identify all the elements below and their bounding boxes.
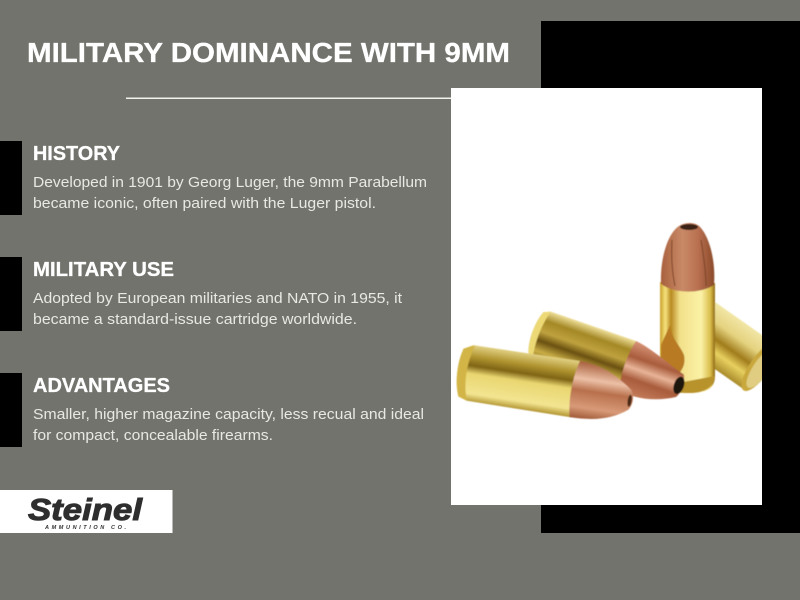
advantages body text: for compact, concealable firearms.: [33, 427, 273, 444]
logo: Steinel Ammunition Co.: Steinel: [28, 492, 144, 527]
panel: military use: [0, 257, 403, 331]
advantages body text: Smaller, higher magazine capacity, less recual and ideal: [33, 406, 424, 423]
title underline: [126, 98, 451, 99]
black backing panel: [541, 21, 800, 533]
advantages accent bar: [0, 373, 22, 447]
cartridge: front left, lying: [456, 344, 634, 420]
history body text: Developed in 1901 by Georg Luger, the 9mm Parabellum: [33, 174, 427, 191]
logo: Steinel Ammunition Co.: AMMUNITION CO.: [44, 525, 126, 531]
logo: Steinel Ammunition Co.: [0, 490, 172, 533]
military use accent bar: [0, 257, 22, 331]
history body text: became iconic, often paired with the Luger pistol.: [33, 195, 376, 212]
cartridge: upright round: [660, 223, 715, 393]
panel: advantages: [0, 373, 424, 447]
military use heading: MILITARY USE: [33, 259, 174, 281]
panel: history: [0, 141, 427, 215]
history accent bar: [0, 141, 22, 215]
advantages heading: ADVANTAGES: [33, 375, 170, 397]
title: MILITARY DOMINANCE WITH 9MM: [27, 37, 510, 68]
cartridge: back right, behind upright round: [714, 302, 762, 392]
military use body text: Adopted by European militaries and NATO in 1955, it: [33, 290, 403, 307]
advantages body text: [33, 406, 424, 444]
history body text: [33, 174, 427, 212]
history heading: HISTORY: [33, 143, 121, 165]
photo: 9mm cartridges on white: [451, 88, 785, 505]
cartridge: middle, lying: [528, 310, 685, 400]
military use body text: [33, 290, 403, 328]
military use body text: became a standard-issue cartridge worldwide.: [33, 311, 357, 328]
